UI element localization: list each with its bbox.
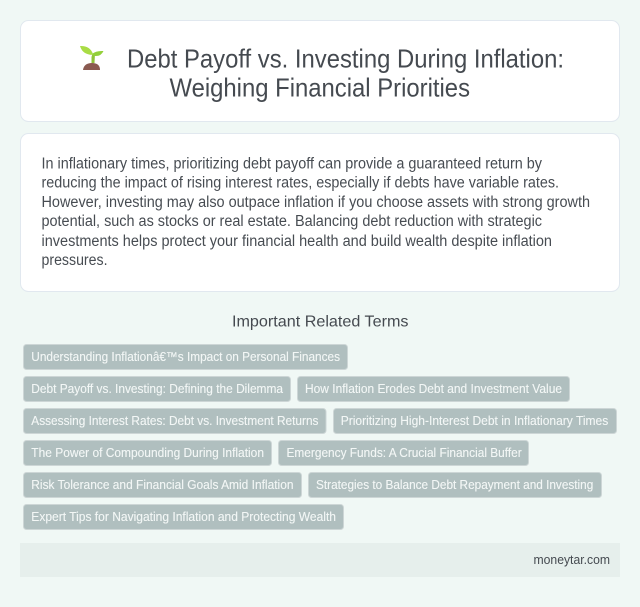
panel: intro text card xyxy=(20,134,620,292)
tag xyxy=(24,408,326,434)
tag: Assessing Interest Rates: Debt vs. Investment Returns xyxy=(31,414,319,428)
text block: intro paragraph: reducing the impact of rising interest rates, especially if debts have variable rates. xyxy=(42,174,559,192)
title: Weighing Financial Priorities xyxy=(170,72,470,102)
tag xyxy=(24,440,272,466)
tag: Risk Tolerance and Financial Goals Amid Inflation xyxy=(31,478,294,492)
tag xyxy=(278,440,528,466)
footer credit: moneytar.com xyxy=(534,552,610,567)
panel: related term tags xyxy=(24,344,616,530)
tag xyxy=(308,472,602,498)
text block: intro paragraph: However, investing may also outpace inflation if you choose assets with strong growth xyxy=(42,194,590,211)
panel: title card xyxy=(20,20,620,122)
text block: intro paragraph: investments helps protect your financial health and build wealth despite inflation xyxy=(42,233,552,250)
tag: Emergency Funds: A Crucial Financial Buffer xyxy=(286,446,522,460)
text block: intro paragraph: potential, such as stocks or real estate. Balancing debt reduction with strategic xyxy=(42,213,542,230)
tag: Expert Tips for Navigating Inflation and Protecting Wealth xyxy=(31,510,336,524)
heading: important related terms: Important Related Terms xyxy=(232,314,408,330)
tag: Prioritizing High-Interest Debt in Inflationary Times xyxy=(341,414,608,428)
tag xyxy=(24,344,348,370)
footer bar xyxy=(20,543,620,577)
title xyxy=(127,44,564,102)
text block: intro paragraph xyxy=(42,156,590,269)
tag: The Power of Compounding During Inflation xyxy=(31,446,264,460)
tag: How Inflation Erodes Debt and Investment Value xyxy=(305,382,562,396)
tag xyxy=(334,408,616,434)
title: Debt Payoff vs. Investing During Inflation: xyxy=(127,44,564,74)
tag xyxy=(24,504,344,530)
text block: intro paragraph: pressures. xyxy=(42,252,108,269)
tag: Strategies to Balance Debt Repayment and Investing xyxy=(316,478,593,492)
tag xyxy=(24,376,290,402)
tag: Understanding Inflationâ€™s Impact on Personal Finances xyxy=(31,350,340,364)
tag xyxy=(24,472,302,498)
tag xyxy=(298,376,570,402)
tag: Debt Payoff vs. Investing: Defining the Dilemma xyxy=(31,382,283,396)
text block: intro paragraph: In inflationary times, prioritizing debt payoff can provide a guaranteed return by xyxy=(42,156,542,172)
icon: sprout xyxy=(80,46,104,70)
